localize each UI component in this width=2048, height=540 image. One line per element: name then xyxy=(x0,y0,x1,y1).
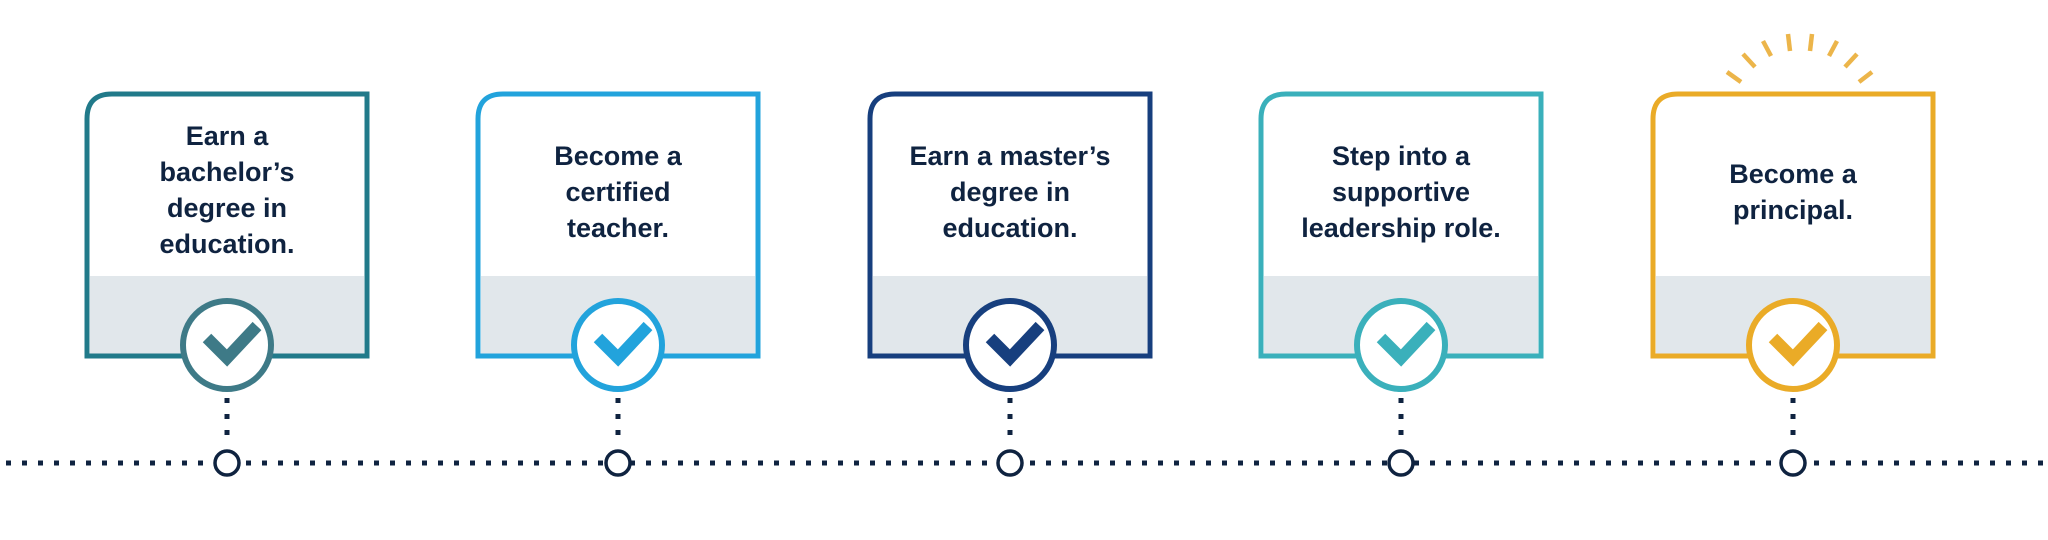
icon: check 5 xyxy=(1749,301,1837,389)
icon: check 2 xyxy=(574,301,662,389)
text: step 4: leadership role. xyxy=(1301,213,1501,243)
text: step 3: degree in xyxy=(950,177,1070,207)
icon: check 3 xyxy=(966,301,1054,389)
connector 1 xyxy=(215,398,239,475)
step 5 xyxy=(1653,94,1933,475)
icon: check 4 xyxy=(1357,301,1445,389)
icon: check 1 xyxy=(183,301,271,389)
connector 3 xyxy=(998,398,1022,475)
text: step 3: Earn a master’s xyxy=(909,141,1111,171)
connector 2 xyxy=(606,398,630,475)
icon: celebration rays xyxy=(1727,34,1872,82)
text: step 2: teacher. xyxy=(567,213,669,243)
text: step 4: Step into a xyxy=(1332,141,1471,171)
text: step 3: education. xyxy=(942,213,1078,243)
step 4 xyxy=(1261,94,1541,475)
connector 4 xyxy=(1389,398,1413,475)
text: step 3 xyxy=(909,141,1111,243)
text: step 4: supportive xyxy=(1332,177,1470,207)
text: step 5: Become a xyxy=(1729,159,1858,189)
text: step 1: education. xyxy=(159,229,295,259)
text: step 1: Earn a xyxy=(186,121,269,151)
text: step 2 xyxy=(554,141,683,243)
text: step 1: degree in xyxy=(167,193,287,223)
step 1 xyxy=(87,94,367,475)
step 2 xyxy=(478,94,758,475)
timeline dotted line xyxy=(6,460,2048,466)
text: step 5: principal. xyxy=(1733,195,1853,225)
text: step 2: certified xyxy=(565,177,671,207)
text: step 5 xyxy=(1729,159,1858,225)
connector 5 xyxy=(1781,398,1805,475)
text: step 2: Become a xyxy=(554,141,683,171)
text: step 1: bachelor’s xyxy=(159,157,295,187)
text: step 4 xyxy=(1301,141,1501,243)
step 3 xyxy=(870,94,1150,475)
text: step 1 xyxy=(159,121,295,259)
